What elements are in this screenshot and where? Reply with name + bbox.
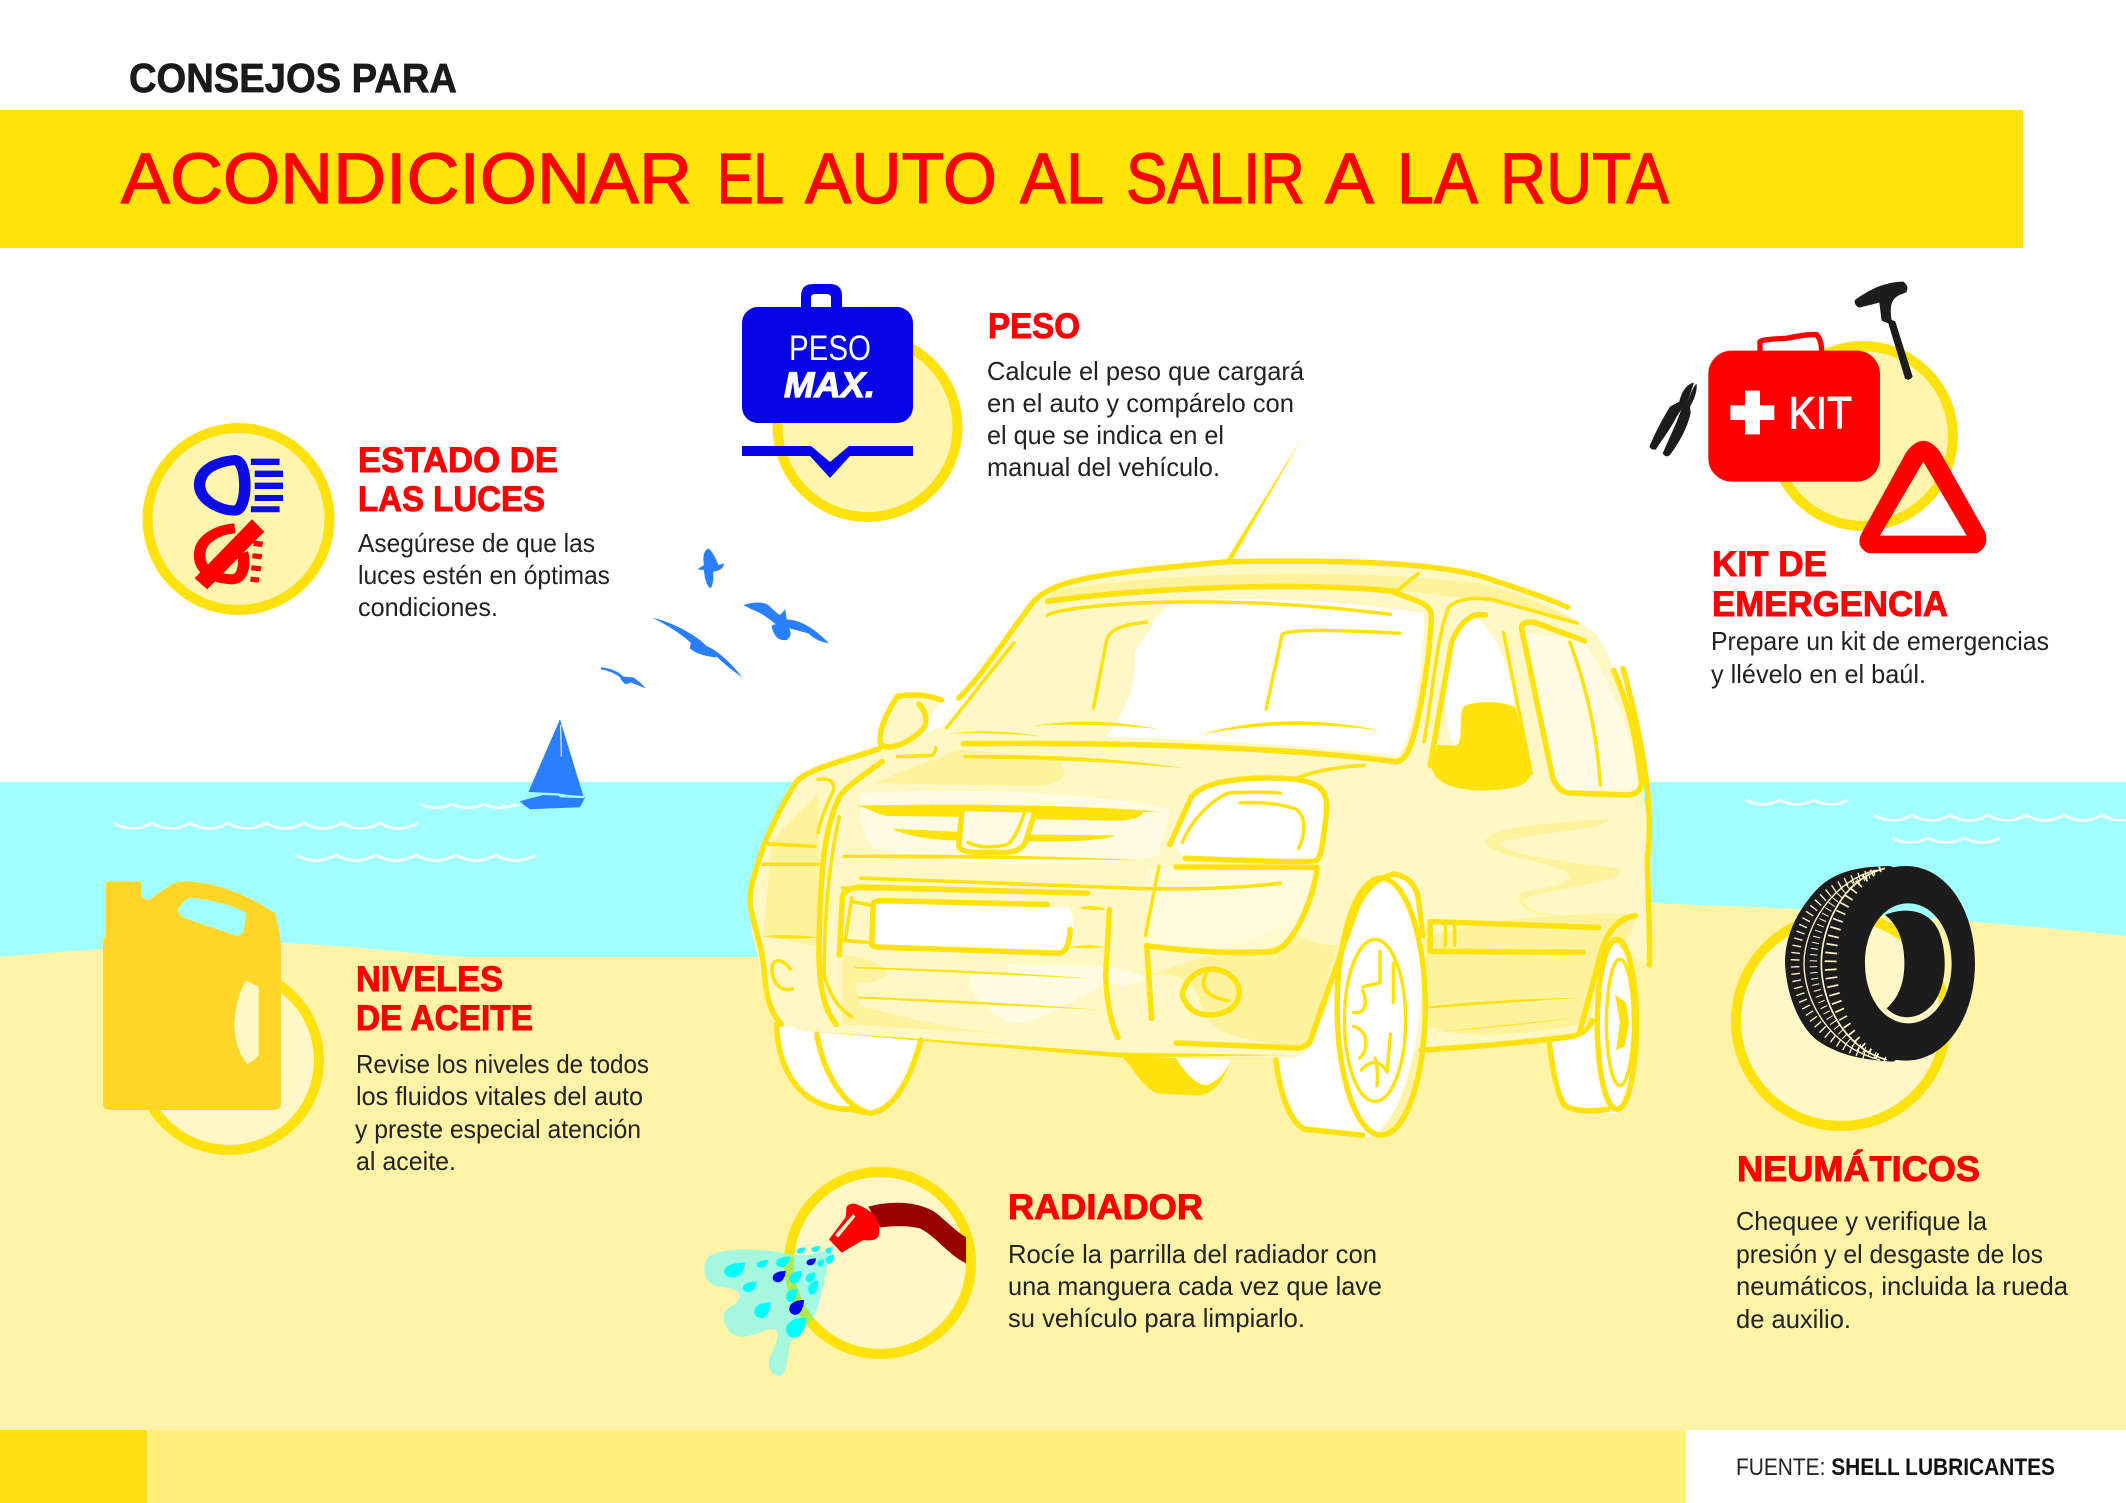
car body	[750, 561, 1650, 1058]
title: AL	[1020, 140, 1104, 219]
icon: bird top	[697, 548, 724, 588]
panel: niveles de aceite	[103, 881, 649, 1176]
heading: LAS LUCES	[358, 480, 545, 519]
icon: circle	[789, 1172, 971, 1354]
car outline strokes	[750, 561, 1650, 1135]
title: SALIR	[1126, 140, 1305, 219]
heading: RADIADOR	[1008, 1188, 1203, 1227]
icon: headlights	[195, 459, 283, 589]
body text: en el auto y compárelo con	[987, 388, 1294, 418]
panel: radiador	[704, 1172, 1382, 1376]
source credit: FUENTE: SHELL LUBRICANTES	[1736, 1454, 2055, 1481]
icon: warning triangle	[1859, 441, 1986, 553]
icon: weight max bag	[742, 284, 913, 478]
heading: ESTADO DE	[358, 441, 558, 480]
sea background	[0, 782, 2126, 972]
wheels white fill	[776, 874, 1638, 1137]
icon: sailboat	[500, 719, 585, 809]
panel: neumaticos	[1736, 866, 2069, 1334]
body text: Asegúrese de que las	[358, 528, 595, 558]
heading: NIVELES	[356, 960, 503, 999]
heading	[356, 960, 533, 1038]
side door glass	[1446, 615, 1516, 746]
icon: bird middle	[652, 618, 743, 678]
heading	[1712, 545, 1948, 624]
icon: wrench	[1855, 282, 1913, 380]
overline: consejos para: CONSEJOS PARA	[129, 55, 457, 101]
front headlight glass	[1173, 778, 1327, 861]
body text	[1736, 1206, 2069, 1334]
body text: los fluidos vitales del auto	[356, 1081, 643, 1111]
car illustration	[750, 561, 1650, 1137]
seat	[1431, 702, 1531, 790]
title: LA	[1397, 140, 1479, 219]
title: A	[1325, 140, 1375, 219]
body text: Prepare un kit de emergencias	[1711, 626, 2049, 656]
birds and sailboat	[500, 548, 829, 809]
body text	[355, 1049, 649, 1176]
icon: circle	[1736, 916, 1946, 1126]
body text: Calcule el peso que cargará	[987, 356, 1305, 386]
icon: pliers	[1649, 383, 1697, 456]
footer bar dark segment	[0, 1430, 147, 1503]
body text: de auxilio.	[1736, 1304, 1851, 1334]
heading: NEUMÁTICOS	[1737, 1149, 1980, 1189]
icon: emergency kit: KIT	[1789, 387, 1852, 438]
body text: luces estén en óptimas	[358, 560, 610, 590]
icon: hose spraying water	[704, 1203, 966, 1376]
title: AUTO	[805, 140, 997, 219]
heading: KIT DE	[1712, 545, 1827, 584]
body text: Rocíe la parrilla del radiador con	[1008, 1239, 1377, 1269]
icon: circle	[139, 970, 319, 1150]
number plate	[876, 904, 1073, 951]
panel: kit de emergencia	[1649, 282, 2049, 689]
body text: Chequee y verifique la	[1736, 1206, 1988, 1236]
body text: al aceite.	[356, 1146, 456, 1176]
body text: Revise los niveles de todos	[356, 1049, 649, 1079]
car filled details	[763, 721, 1580, 1096]
body text: y llévelo en el baúl.	[1711, 659, 1926, 689]
heading: DE ACEITE	[356, 999, 533, 1038]
panel: peso	[742, 284, 1305, 517]
icon: lights circle	[148, 428, 330, 610]
icon: circle	[1773, 346, 1953, 526]
heading	[358, 441, 558, 519]
header band	[0, 110, 2023, 248]
body text: manual del vehículo.	[987, 452, 1220, 482]
body text: condiciones.	[358, 592, 498, 622]
pale patches	[860, 633, 1638, 1023]
body text	[987, 356, 1305, 482]
title: EL	[717, 140, 784, 219]
icon: circle	[778, 337, 958, 517]
icon: bird small	[601, 667, 646, 688]
body text	[358, 528, 610, 622]
title: ACONDICIONAR	[121, 140, 692, 219]
footer bar light segment	[147, 1430, 1686, 1503]
body text: su vehículo para limpiarlo.	[1008, 1303, 1305, 1333]
body text: y preste especial atención	[355, 1114, 641, 1144]
title	[121, 140, 1670, 219]
icon: bird right	[743, 602, 829, 643]
body text: neumáticos, incluida la rueda	[1736, 1271, 2069, 1301]
heading: PESO	[988, 307, 1080, 346]
panel: estado de las luces	[148, 428, 610, 622]
shaded patches	[763, 573, 1638, 1046]
heading: EMERGENCIA	[1712, 585, 1948, 624]
icon: oil jug	[103, 881, 281, 1110]
icon: weight max bag: PESO	[789, 329, 871, 368]
windshield glass	[1107, 599, 1424, 755]
beach background	[0, 903, 2126, 1430]
title: RUTA	[1500, 140, 1670, 219]
leader line: roof to peso	[1225, 438, 1302, 562]
body text: el que se indica en el	[987, 420, 1224, 450]
icon: weight max bag: MAX.	[784, 366, 875, 405]
sea waves	[114, 800, 2126, 860]
icon: tire	[1785, 866, 1975, 1062]
body text: una manguera cada vez que lave	[1008, 1271, 1382, 1301]
icon: emergency kit	[1649, 282, 1986, 553]
body text: presión y el desgaste de los	[1736, 1239, 2043, 1269]
mirror fill	[880, 695, 942, 747]
body text	[1711, 626, 2049, 689]
body text	[1008, 1239, 1382, 1333]
